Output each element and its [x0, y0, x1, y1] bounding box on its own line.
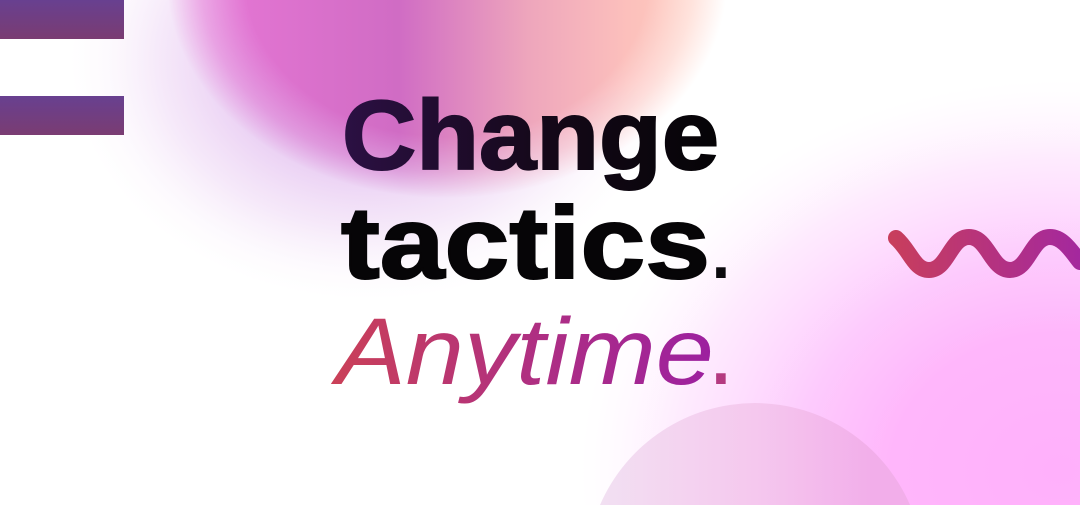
headline: Anytime.: .	[707, 294, 735, 406]
background: pink to peach blob at top	[172, 0, 718, 194]
icon: squiggle wave	[896, 237, 1080, 270]
icon: second bar	[0, 96, 124, 135]
headline: tactics.: tactics	[341, 186, 710, 300]
icon: top bar	[0, 0, 124, 39]
headline: Anytime.: Anytime	[330, 299, 714, 405]
decorative circle at bottom	[600, 403, 910, 505]
headline: tactics.: .	[707, 188, 735, 300]
headline: Change: Change	[342, 80, 719, 190]
